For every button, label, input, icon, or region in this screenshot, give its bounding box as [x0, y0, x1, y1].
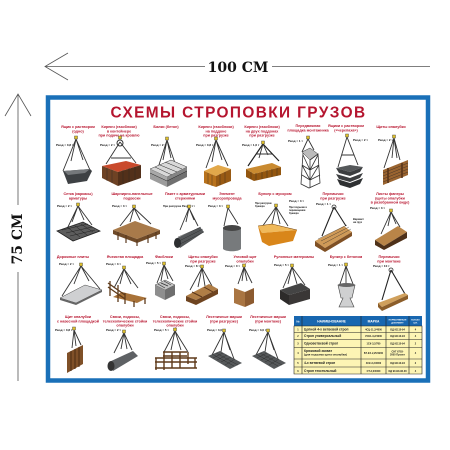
item: reinforcement mesh: арматуры — [69, 196, 87, 200]
item: braces and telescopic props, roll: Рвод = 2 т — [106, 328, 121, 332]
item: bricks on two pallets: на двух поддонах — [246, 129, 279, 133]
table rows: (для подъема щита опалубки) — [304, 352, 347, 356]
item: beams: Балки (бетон) — [153, 125, 179, 129]
item: reinforcement mesh — [57, 192, 100, 241]
item: lintels during unloading: при разгрузке — [320, 196, 346, 200]
table rows: 2000 Проект — [390, 354, 406, 356]
item: braces and telescopic props, frame: телескопические стойки — [153, 319, 198, 323]
item: mortar box: Ящик с раствором — [61, 125, 95, 129]
table header: № — [296, 320, 300, 324]
item: lintels during installation: Перемычки — [378, 255, 400, 259]
table rows: 6 — [297, 370, 299, 373]
item: bricks in container: при подаче на кровлю — [98, 134, 140, 138]
item: bricks on pallet, unloading: при разгрузке — [203, 134, 229, 138]
item: formwork panels unloading — [185, 255, 218, 305]
item: lintels during installation: Рвод = 10 т — [373, 264, 390, 268]
table body — [294, 326, 422, 374]
table rows — [294, 316, 422, 374]
item: lintels during unloading: Рвод = 1 т — [316, 202, 331, 206]
item: reinforcement mesh: Сетка (каркасы) — [63, 192, 93, 196]
table rows: 2 — [415, 342, 417, 346]
item: formwork panels — [376, 125, 408, 185]
table rows: ОД 91110-96-00 — [388, 370, 407, 373]
item: cellular platform: Ячеистая площадка — [107, 255, 144, 259]
item: pipeline element: мусоропровода — [212, 196, 242, 200]
item: corner formwork panel — [225, 255, 257, 307]
item: box with mortar, stacked — [328, 124, 368, 188]
item: formwork panels: Рвод = 2 т — [378, 138, 393, 142]
item: stair flights during unloading — [206, 315, 243, 369]
table header — [294, 316, 422, 326]
item: bricks on two pallets: Рвод = 1,6 т — [242, 143, 260, 147]
table rows: 4 — [415, 335, 417, 338]
table header: ДОКУМЕНТ — [391, 322, 404, 324]
item: bunker with debris: При разгрузке — [255, 202, 272, 205]
table rows: УСК1-3,2/4000 — [365, 335, 383, 338]
item: box with mortar, stacked: Ящики с раствором — [328, 124, 364, 128]
item: plywood sheets: в разобранном виде) — [371, 201, 410, 205]
item: stair flights during installation — [249, 315, 287, 369]
table rows: 1 — [297, 328, 299, 332]
item: stair flights during unloading: Лестничные марши — [206, 315, 242, 319]
item: assembly platform: Рвод = 1 т — [288, 139, 303, 143]
table rows: Крюковой захват — [304, 349, 332, 353]
table rows: 1СК-3,2/780 — [367, 342, 381, 346]
item: reinforcement mesh: Рвод = 2 т — [57, 204, 72, 208]
item: package with reinforcing bars — [163, 192, 206, 248]
item: braces and telescopic props, roll — [103, 315, 148, 371]
poster frame — [48, 98, 428, 380]
table rows: 4СК-3,2/4000 — [366, 362, 382, 365]
item: bricks on two pallets: при разгрузке — [249, 134, 275, 138]
table rows: 3 — [297, 342, 299, 346]
item: roll materials: Рулонные материалы — [274, 255, 314, 259]
item: bricks on two pallets — [242, 125, 281, 181]
item: braces and telescopic props, frame: Связи, подкосы, — [160, 315, 190, 319]
table rows: СНГ 6703- — [391, 350, 404, 354]
item: package with reinforcing bars: Пакет с арматурными — [165, 192, 205, 196]
item: bricks in container — [98, 125, 141, 186]
table rows: СТ-2,0/4000 — [367, 370, 381, 373]
item: assembly platform: площадка монтажника — [287, 128, 330, 132]
item: formwork panels unloading: Щиты опалубки — [188, 255, 218, 259]
item: stair flights during installation: Рвод = 3,0 т — [249, 328, 267, 332]
item: formwork panel with hanging platform: Щит опалубки — [65, 315, 91, 319]
table rows: Строп текстильный — [304, 369, 336, 373]
item: plywood sheets: Листы фанеры — [376, 192, 404, 196]
item: road slabs: Дорожные плиты — [57, 255, 89, 259]
table rows: ОД 91110-94 — [390, 335, 405, 338]
table rows: Цепной 4-х ветвевой строп — [304, 328, 349, 332]
table rows: 4 — [297, 352, 299, 355]
table header: ШТ. — [414, 322, 418, 324]
item: bricks on pallet, unloading: Кирпич (газоблоки) — [198, 125, 234, 129]
item: bunker with debris: перемещении — [289, 209, 306, 212]
height dimension arrow: 75 CM — [10, 214, 26, 264]
table rows: Б7-КЗ-2,25/4200 — [364, 352, 384, 355]
item: braces and telescopic props, roll: опалубки — [116, 324, 134, 328]
item: assembly platform — [287, 124, 330, 188]
item: mortar box — [56, 125, 95, 184]
item: foundation blocks: Фасблоки — [155, 255, 174, 259]
item: formwork panel with hanging platform — [55, 315, 100, 373]
item: braces and telescopic props, frame: опалубки — [166, 324, 184, 328]
table header: НОРМАТИВНЫЙ — [389, 320, 406, 322]
height dimension arrow — [5, 94, 31, 381]
item: road slabs: Рвод = 2 т — [59, 262, 74, 266]
item: beams — [150, 125, 187, 187]
item: pipeline element: Элемент — [219, 192, 235, 196]
item: corner formwork panel: Рвод = 0 т — [225, 264, 240, 268]
item: bricks on two pallets: Кирпич (газоблоки) — [244, 125, 280, 129]
item: hinged panel suspensions — [111, 192, 160, 246]
item: bricks on pallet, unloading: на поддоне — [206, 129, 226, 133]
item: bunker with debris — [255, 192, 307, 246]
item: lintels during unloading: на груз — [353, 221, 363, 224]
item: cellular platform — [106, 255, 147, 307]
item: bricks in container: в контейнере — [107, 129, 131, 133]
item: package with reinforcing bars: стержнями — [175, 196, 196, 200]
table rows: 4-х ветвевой строп — [304, 361, 335, 365]
item: corner formwork panel: Угловой щит — [233, 255, 257, 259]
item: formwork panels unloading: при разгрузке — [190, 259, 216, 263]
item: bunker with concrete — [328, 255, 363, 307]
table rows: ОД 91110-94 — [390, 362, 405, 365]
item: bricks on pallet, unloading — [196, 125, 234, 187]
item: foundation blocks — [146, 255, 175, 300]
item: lintels during installation: при монтаже — [377, 259, 401, 263]
table header: НАИМЕНОВАНИЕ — [317, 320, 347, 324]
item: bricks on pallet, unloading: Рвод = 0,8 т — [196, 143, 214, 147]
table rows: 2 — [297, 335, 299, 338]
item: bunker with concrete: Бункер с бетоном — [330, 255, 363, 259]
table rows: ОД 91110-94 — [390, 328, 405, 332]
item: hinged panel suspensions: подвески — [123, 196, 141, 200]
item: corner formwork panel: опалубки — [236, 259, 254, 263]
item: braces and telescopic props, frame: Рвод = 5 т — [154, 328, 169, 332]
table rows: 4 — [415, 328, 417, 332]
item: beams: Рвод = 2 т — [151, 143, 166, 147]
item: hinged panel suspensions: Шарнирно-панельные — [111, 192, 153, 196]
item: braces and telescopic props, roll: Связи, подкосы, — [110, 315, 140, 319]
table rows: Строп универсальный — [304, 334, 341, 338]
table rows: ОД 91110-94 — [390, 342, 405, 346]
item: pipeline element: Рвод = 3 т — [208, 204, 223, 208]
width dimension arrow: 100 CM — [208, 60, 268, 76]
item: lintels during installation — [373, 255, 408, 311]
item: stair flights during unloading: Рвод = 3,0 т — [207, 328, 225, 332]
item: bunker with concrete: Рвод = 1 т — [328, 263, 343, 267]
item: pipeline element — [208, 192, 242, 251]
title: СХЕМЫ СТРОПОВКИ ГРУЗОВ — [111, 104, 366, 122]
item: roll materials — [274, 255, 314, 305]
item: bunker with debris: Рвод = 3 т — [289, 199, 304, 203]
item: bricks in container: Кирпич (газоблоки) — [101, 125, 137, 129]
item: stair flights during unloading: (при разгрузке) — [210, 319, 239, 323]
item: formwork panels: Щиты опалубки — [376, 125, 406, 129]
item: stair flights during installation: Лестничные марши — [250, 315, 286, 319]
item: mortar box: Рвод = 0,8 т — [56, 143, 74, 147]
item: mortar box: (одно) — [72, 129, 85, 133]
item: formwork panel with hanging platform: Рвод = 0,8 т — [55, 328, 73, 332]
item: plywood sheets: (щиты опалубки — [375, 196, 406, 200]
item: package with reinforcing bars: При разгрузке Рвод = 1 т — [163, 204, 196, 208]
item: plywood sheets — [370, 192, 410, 250]
table rows: 4 — [415, 370, 417, 373]
item: road slabs — [57, 255, 102, 305]
item: cellular platform: Рвод = 3 т — [106, 262, 121, 266]
table rows: Одноветвевой строп — [304, 342, 338, 346]
item: bunker with debris: бункера — [289, 212, 299, 215]
item: bunker with debris: При подъеме и — [289, 206, 307, 209]
item: formwork panels unloading: Рвод = 8 т — [185, 264, 200, 268]
table rows: 4СЦ-11,2/4000 — [365, 328, 383, 332]
table of slings — [294, 316, 422, 374]
item: foundation blocks: Рвод = 5 т — [146, 261, 161, 265]
item: box with mortar, stacked: («черепаха») — [334, 128, 358, 132]
item: bunker with debris: Бункер с мусором — [258, 192, 292, 196]
item: lintels during unloading — [315, 192, 365, 252]
item: lintels during unloading: Перемычки — [322, 192, 344, 196]
width dimension arrow — [45, 53, 430, 80]
table rows: 5 — [297, 362, 299, 365]
item: braces and telescopic props, frame — [153, 315, 198, 370]
item: braces and telescopic props, roll: телескопические стойки — [103, 319, 148, 323]
table rows: 4 — [415, 352, 417, 355]
table rows: 2 — [415, 362, 417, 365]
item: formwork panel with hanging platform: с навесной площадкой — [57, 319, 100, 323]
item: bricks in container: Рвод = 2 т — [100, 143, 115, 147]
item: plywood sheets: Рвод = 3 т — [370, 206, 385, 210]
item: stair flights during installation: (при монтаже) — [255, 319, 282, 323]
item: bunker with debris: бункера — [255, 205, 265, 208]
item: assembly platform: Передвижная — [296, 124, 320, 128]
table header: КОЛ-ВО — [411, 320, 420, 322]
item: hinged panel suspensions: Рвод = 3 т — [112, 204, 127, 208]
table header: МАРКА — [368, 320, 380, 324]
item: lintels during unloading: Вариант — [353, 218, 364, 221]
item: roll materials: Рвод = 5 т — [274, 263, 289, 267]
item: box with mortar, stacked: Рвод = 2 т — [353, 138, 368, 142]
